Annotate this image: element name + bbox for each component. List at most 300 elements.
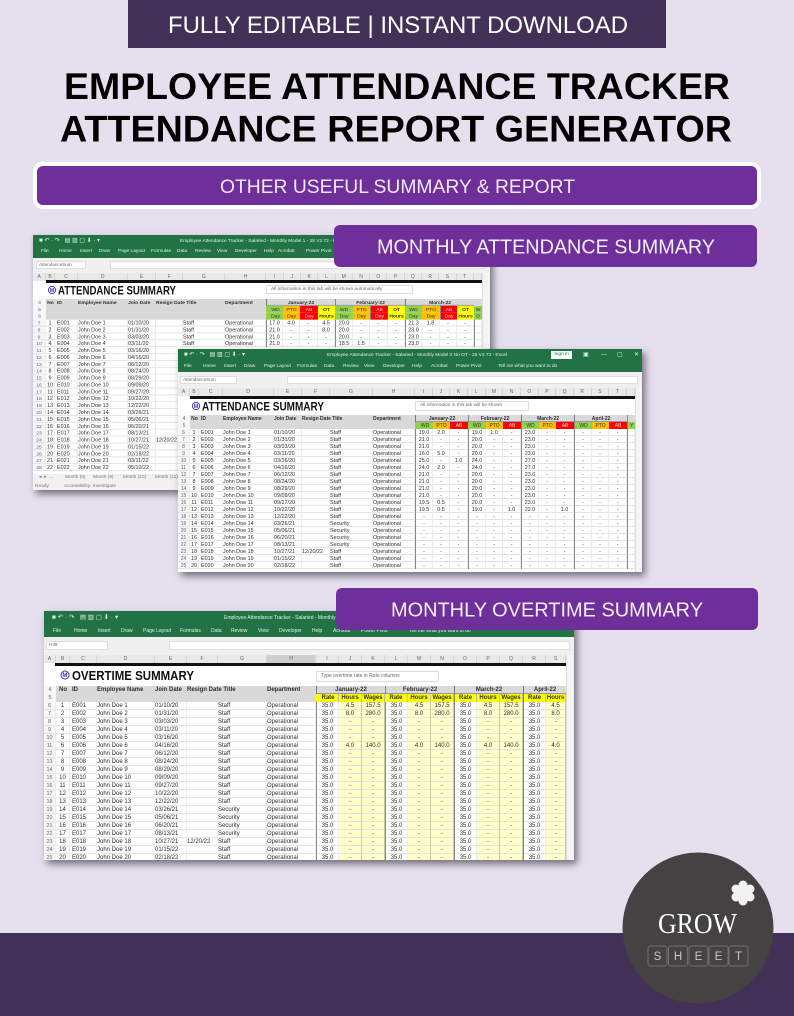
overtime table: - (418, 767, 420, 773)
attendance table: - (617, 437, 618, 443)
attendance table: Security (330, 542, 349, 548)
overtime table: - (349, 775, 351, 781)
attendance table: - (582, 507, 584, 513)
attendance table: - (564, 486, 565, 492)
overtime table: - (418, 799, 420, 805)
overtime table: 03/16/20 (155, 735, 178, 741)
attendance table: 20.0 (472, 472, 482, 478)
overtime table: - (349, 847, 351, 853)
column letters: E (286, 389, 289, 395)
attendance table: 02/18/22 (128, 451, 149, 457)
attendance table: 03/11/22 (128, 458, 149, 464)
attendance table: - (476, 521, 478, 527)
attendance table: - (599, 507, 601, 513)
attendance table: - (546, 465, 548, 471)
column letters: F (314, 389, 317, 395)
attendance table: John Doe 4 (78, 341, 106, 347)
column letters: M (492, 389, 496, 395)
overtime table: - (349, 799, 351, 805)
sheet tabs and status bar (33, 474, 490, 490)
attendance table: Hours (389, 314, 404, 320)
attendance table: - (493, 563, 495, 569)
column letters: G (240, 656, 244, 662)
ribbon: Data (211, 628, 222, 634)
attendance table: - (546, 479, 548, 485)
attendance table: - (599, 486, 601, 492)
overtime table: - (510, 831, 512, 837)
overtime table: Hours (341, 695, 359, 701)
overtime table: Operational (267, 847, 298, 853)
attendance table: Staff (330, 444, 341, 450)
attendance table: John Doe 21 (78, 458, 109, 464)
attendance table: 23.0 (408, 334, 419, 340)
attendance table: - (378, 334, 379, 340)
attendance table: Operational (373, 444, 401, 450)
overtime table: 10 (59, 775, 66, 781)
overtime table: - (487, 719, 489, 725)
overtime table: 35.0 (322, 727, 333, 733)
attendance table: E020 (201, 563, 214, 569)
overtime table: 35.0 (322, 783, 333, 789)
attendance table: - (493, 535, 495, 541)
attendance table: - (430, 328, 431, 333)
ribbon: Tell me what you want to do (409, 628, 471, 634)
attendance table: 16 (181, 500, 186, 506)
attendance table: E011 (57, 389, 69, 395)
attendance table: - (617, 465, 618, 471)
column letters: H (392, 389, 395, 395)
sheet tabs and status bar: Month (9) (93, 475, 114, 480)
overtime table: 280.0 (504, 711, 519, 717)
overtime table: 35.0 (391, 711, 402, 717)
overtime table: - (487, 807, 489, 813)
overtime table: 35.0 (391, 799, 402, 805)
attendance table: - (511, 542, 512, 548)
attendance table: E020 (57, 451, 70, 457)
attendance table: 20.0 (339, 334, 349, 340)
overtime table: 4 (48, 687, 52, 693)
ribbon: Sign in (554, 352, 569, 357)
attendance table: - (493, 437, 495, 443)
attendance table: - (599, 437, 601, 443)
ribbon (178, 349, 642, 372)
attendance table: Staff (183, 321, 194, 327)
attendance table: - (440, 521, 442, 527)
attendance table: - (582, 472, 584, 478)
attendance table: - (546, 563, 548, 569)
attendance table: 4.5 (322, 321, 330, 327)
attendance table: AB (615, 423, 621, 429)
attendance table: - (529, 528, 531, 534)
attendance table: WD (271, 307, 280, 313)
attendance table: 06/20/21 (128, 424, 149, 430)
overtime table: 35.0 (460, 743, 471, 749)
attendance table: Staff (330, 437, 341, 443)
overtime table: E005 (72, 735, 86, 741)
overtime table: E012 (72, 791, 86, 797)
attendance table: - (546, 444, 548, 450)
attendance table: John Doe 6 (78, 355, 106, 361)
overtime table: - (555, 847, 557, 853)
attendance table: John Doe 17 (223, 542, 254, 548)
attendance table: 09/09/20 (274, 493, 295, 499)
attendance table: 4 (38, 300, 41, 306)
overtime table: 35.0 (460, 839, 471, 845)
attendance table: E015 (201, 528, 214, 534)
attendance table: - (458, 472, 459, 478)
overtime table: 8.0 (415, 711, 423, 717)
attendance table: Operational (225, 341, 253, 347)
attendance table: 23.0 (525, 472, 535, 478)
overtime table: 35.0 (529, 823, 540, 829)
attendance table: - (617, 563, 618, 569)
overtime table: - (555, 823, 557, 829)
attendance table: 17 (47, 431, 53, 437)
attendance table: 11 (36, 348, 42, 354)
attendance table: - (493, 514, 495, 520)
overtime table: - (418, 727, 420, 733)
ribbon: Employee Attendance Tracker - Salaried - Monthly Model (224, 615, 350, 621)
overtime table: John Doe 1 (97, 703, 128, 709)
attendance table: - (378, 328, 379, 333)
attendance table: - (440, 458, 442, 464)
attendance table: 21.0 (419, 472, 429, 478)
overtime table: 35.0 (529, 783, 540, 789)
attendance table: 21.0 (419, 437, 429, 443)
attendance table: - (440, 444, 442, 450)
attendance table: - (440, 493, 442, 499)
overtime table: - (349, 831, 351, 837)
attendance table: 10 (36, 341, 42, 347)
overtime table: 35.0 (391, 831, 402, 837)
column letters: K (371, 656, 375, 662)
overtime table: - (487, 759, 489, 765)
column letters: O (527, 389, 531, 395)
attendance table: Day (427, 314, 436, 320)
attendance table: - (458, 493, 459, 499)
overtime table: - (441, 775, 443, 781)
attendance table: - (511, 528, 512, 534)
attendance table: John Doe 7 (223, 472, 251, 478)
overtime table: Wages (432, 695, 452, 701)
scrollbar (482, 273, 490, 474)
sheet heading: M (194, 404, 199, 410)
attendance table: E004 (201, 451, 214, 457)
attendance table: 3 (192, 444, 196, 450)
column letters: R (532, 656, 536, 662)
overtime table: Staff (218, 775, 230, 781)
overtime table: 35.0 (322, 839, 333, 845)
overtime table: E014 (72, 807, 86, 813)
attendance table: Department (373, 416, 401, 422)
overtime table: - (372, 839, 374, 845)
button: monthly attendance summary: MONTHLY ATTENDANCE SUMMARY (377, 236, 715, 258)
overtime table: 35.0 (460, 711, 471, 717)
attendance table: - (582, 430, 584, 436)
attendance table: - (599, 500, 601, 506)
overtime table: 4.0 (415, 743, 423, 749)
attendance table: E012 (201, 507, 214, 513)
attendance table: Day (409, 314, 418, 320)
attendance table: E006 (57, 355, 70, 361)
overtime table: - (372, 799, 374, 805)
attendance table: 23.0 (525, 451, 535, 457)
attendance table: 23.0 (525, 444, 535, 450)
attendance table: Join Date (274, 416, 297, 422)
overtime table: - (441, 847, 443, 853)
attendance table: - (582, 556, 584, 562)
column letters: C (81, 656, 85, 662)
overtime table: - (555, 839, 557, 845)
attendance table: 20.0 (472, 493, 482, 499)
overtime table: - (372, 727, 374, 733)
overtime table: E010 (72, 775, 86, 781)
attendance table: John Doe 2 (78, 328, 106, 333)
attendance table: 18.5 (339, 341, 349, 347)
column letters: P (486, 656, 490, 662)
overtime table: E015 (72, 815, 86, 821)
attendance table: 20.0 (472, 437, 482, 443)
attendance table: - (423, 528, 425, 534)
overtime table: No (59, 687, 67, 693)
attendance table: - (582, 528, 584, 534)
overtime table: Hours (479, 695, 497, 701)
attendance table: W (476, 307, 480, 313)
attendance table: 22 (36, 424, 42, 430)
attendance table: 8 (38, 328, 40, 333)
overtime table: 15 (46, 775, 52, 781)
overtime table: 06/20/21 (155, 823, 178, 829)
logo: Grow Sheet (622, 852, 774, 1004)
overtime table: Staff (218, 759, 230, 765)
logo: Grow Sheet: E (715, 951, 723, 963)
ribbon: Help (312, 628, 322, 634)
attendance table: Day (340, 314, 348, 320)
note box (316, 671, 439, 682)
overtime table: - (349, 727, 351, 733)
attendance table: E004 (57, 341, 70, 347)
ribbon: Page Layout (118, 249, 145, 254)
attendance table: 12/22/20 (274, 514, 295, 520)
column letters: E (169, 656, 172, 662)
column letters: M (417, 656, 421, 662)
ribbon: ▢ (617, 352, 623, 358)
overtime table: 17 (59, 831, 66, 837)
attendance table: 24 (181, 556, 186, 562)
sheet heading: ATTENDANCE SUMMARY (58, 284, 176, 298)
attendance table: 1.8 (427, 321, 434, 327)
attendance table: January-22 (288, 300, 314, 306)
overtime table: 14 (59, 807, 66, 813)
attendance table: 21.0 (419, 486, 429, 492)
column letters: P (394, 274, 397, 280)
attendance table: 10/27/21 (274, 549, 295, 555)
ribbon: Home (59, 249, 72, 254)
overtime table (44, 686, 566, 860)
attendance table: John Doe 19 (78, 444, 109, 450)
overtime table: Staff (218, 703, 230, 709)
attendance table: - (582, 479, 584, 485)
attendance table: E012 (57, 396, 70, 402)
attendance table: 06/20/21 (274, 535, 295, 541)
attendance table: 1 (48, 321, 52, 327)
attendance table: 7 (38, 321, 40, 327)
sheet heading: M (62, 673, 67, 679)
attendance table: - (493, 556, 495, 562)
attendance table: Operational (373, 514, 401, 520)
attendance table: 04/16/20 (274, 465, 295, 471)
attendance table: ID (57, 300, 62, 306)
attendance table: - (458, 563, 459, 569)
sheet tabs and status bar: Month (11) (155, 475, 178, 480)
attendance table: - (395, 321, 397, 327)
attendance table: 17.0 (269, 321, 280, 327)
overtime table: 35.0 (322, 719, 333, 725)
attendance table: - (290, 334, 292, 340)
overtime table: 35.0 (391, 839, 402, 845)
attendance table: 20 (36, 410, 42, 416)
attendance table: 23.0 (525, 479, 535, 485)
overtime table: - (418, 847, 420, 853)
attendance table: - (617, 507, 618, 513)
overtime table: Join Date (155, 687, 182, 693)
overtime table: Hours (547, 695, 564, 701)
overtime table: 5 (61, 735, 64, 741)
overtime table: - (510, 751, 512, 757)
attendance table: - (546, 521, 548, 527)
overtime table: 35.0 (460, 807, 471, 813)
attendance table: John Doe 2 (223, 437, 251, 443)
attendance table: E022 (57, 465, 70, 471)
attendance table: WD (340, 307, 348, 313)
attendance table: - (360, 321, 362, 327)
attendance table: - (564, 451, 565, 457)
attendance table: 01/31/20 (274, 437, 295, 443)
overtime table: Staff (218, 799, 230, 805)
attendance table: April-22 (592, 416, 610, 422)
attendance table: Staff (330, 493, 341, 499)
attendance table: - (464, 321, 466, 327)
attendance table: 03/03/20 (128, 334, 149, 340)
overtime table: E013 (72, 799, 86, 805)
overtime table: 13 (59, 799, 66, 805)
attendance table: - (458, 486, 459, 492)
attendance table: 20.0 (472, 479, 482, 485)
attendance table: E007 (201, 472, 214, 478)
overtime table: 01/15/22 (155, 847, 178, 853)
overtime table: 35.0 (391, 719, 402, 725)
attendance table: 13 (36, 362, 42, 368)
attendance table: - (308, 334, 309, 340)
attendance table: Operational (225, 321, 253, 327)
attendance table: 27 (36, 458, 42, 464)
overtime table: 8 (61, 759, 64, 765)
main title: ATTENDANCE REPORT GENERATOR (60, 108, 732, 150)
attendance table: - (599, 514, 601, 520)
attendance table: 23.0 (525, 437, 535, 443)
attendance table: OT (393, 307, 400, 313)
overtime table: 35.0 (322, 711, 333, 717)
overtime table: 35.0 (391, 767, 402, 773)
attendance table: E008 (201, 479, 214, 485)
attendance table: 18 (191, 549, 197, 555)
attendance table: 01/31/20 (128, 328, 149, 333)
ribbon: Data (177, 249, 187, 254)
overtime table: Staff (218, 719, 230, 725)
attendance table: 25.0 (419, 458, 429, 464)
attendance table: 22.0 (525, 507, 535, 513)
button: monthly overtime summary (336, 588, 758, 630)
attendance table: 27.0 (525, 465, 535, 471)
attendance table: - (395, 334, 397, 340)
overtime table: - (441, 831, 443, 837)
overtime table: 35.0 (391, 847, 402, 853)
column letters: N (440, 656, 444, 662)
ribbon: Employee Attendance Tracker - Salaried - Monthly Model 1 - 25 V2.72 - Excel (180, 238, 345, 244)
attendance table: 14 (181, 486, 186, 492)
attendance table: E005 (201, 458, 214, 464)
button: monthly attendance summary (334, 225, 757, 267)
attendance table: 9 (182, 451, 185, 457)
attendance table: - (582, 493, 584, 499)
overtime table: 35.0 (322, 759, 333, 765)
attendance table: 6 (192, 465, 196, 471)
overtime table: 01/10/20 (155, 703, 178, 709)
overtime table: Staff (218, 751, 230, 757)
overtime table: 35.0 (322, 767, 333, 773)
attendance table: 14 (47, 410, 53, 416)
overtime table: - (418, 783, 420, 789)
overtime table: 35.0 (460, 751, 471, 757)
overtime table: 35.0 (391, 727, 402, 733)
column letters: R (428, 274, 432, 280)
overtime table: 35.0 (322, 703, 333, 709)
overtime table: 35.0 (529, 807, 540, 813)
overtime table: - (441, 791, 443, 797)
overtime table: 04/16/20 (155, 743, 178, 749)
overtime table: 35.0 (529, 719, 540, 725)
attendance table: - (440, 479, 442, 485)
attendance table: John Doe 15 (223, 528, 254, 534)
attendance table: E013 (57, 403, 70, 409)
overtime table: April-22 (534, 687, 556, 693)
attendance table: - (476, 514, 478, 520)
attendance table: 19.0 (472, 507, 482, 513)
attendance table: 8 (182, 444, 185, 450)
attendance table: 6 (182, 430, 185, 436)
section bar: other useful summary and report: OTHER USEFUL SUMMARY & REPORT (220, 176, 575, 198)
overtime table: Operational (267, 767, 298, 773)
overtime table: 03/11/20 (155, 727, 178, 733)
attendance table: January-22 (429, 416, 455, 422)
overtime table: E011 (72, 783, 86, 789)
attendance table: D (476, 314, 480, 320)
ribbon: — (601, 352, 607, 358)
attendance table: 09/27/20 (274, 500, 295, 506)
attendance table: - (511, 535, 512, 541)
overtime table: Operational (267, 799, 298, 805)
column letters: R (580, 389, 584, 395)
formula bar: AttendanceSum (183, 377, 216, 382)
overtime table: Operational (267, 791, 298, 797)
attendance table: - (458, 542, 459, 548)
overtime table: 35.0 (529, 815, 540, 821)
overtime table: 21 (46, 823, 52, 829)
overtime table: 03/26/21 (155, 807, 178, 813)
attendance table: 12/20/22 (156, 438, 177, 444)
overtime table: 06/12/20 (155, 751, 178, 757)
overtime table: Staff (218, 727, 230, 733)
